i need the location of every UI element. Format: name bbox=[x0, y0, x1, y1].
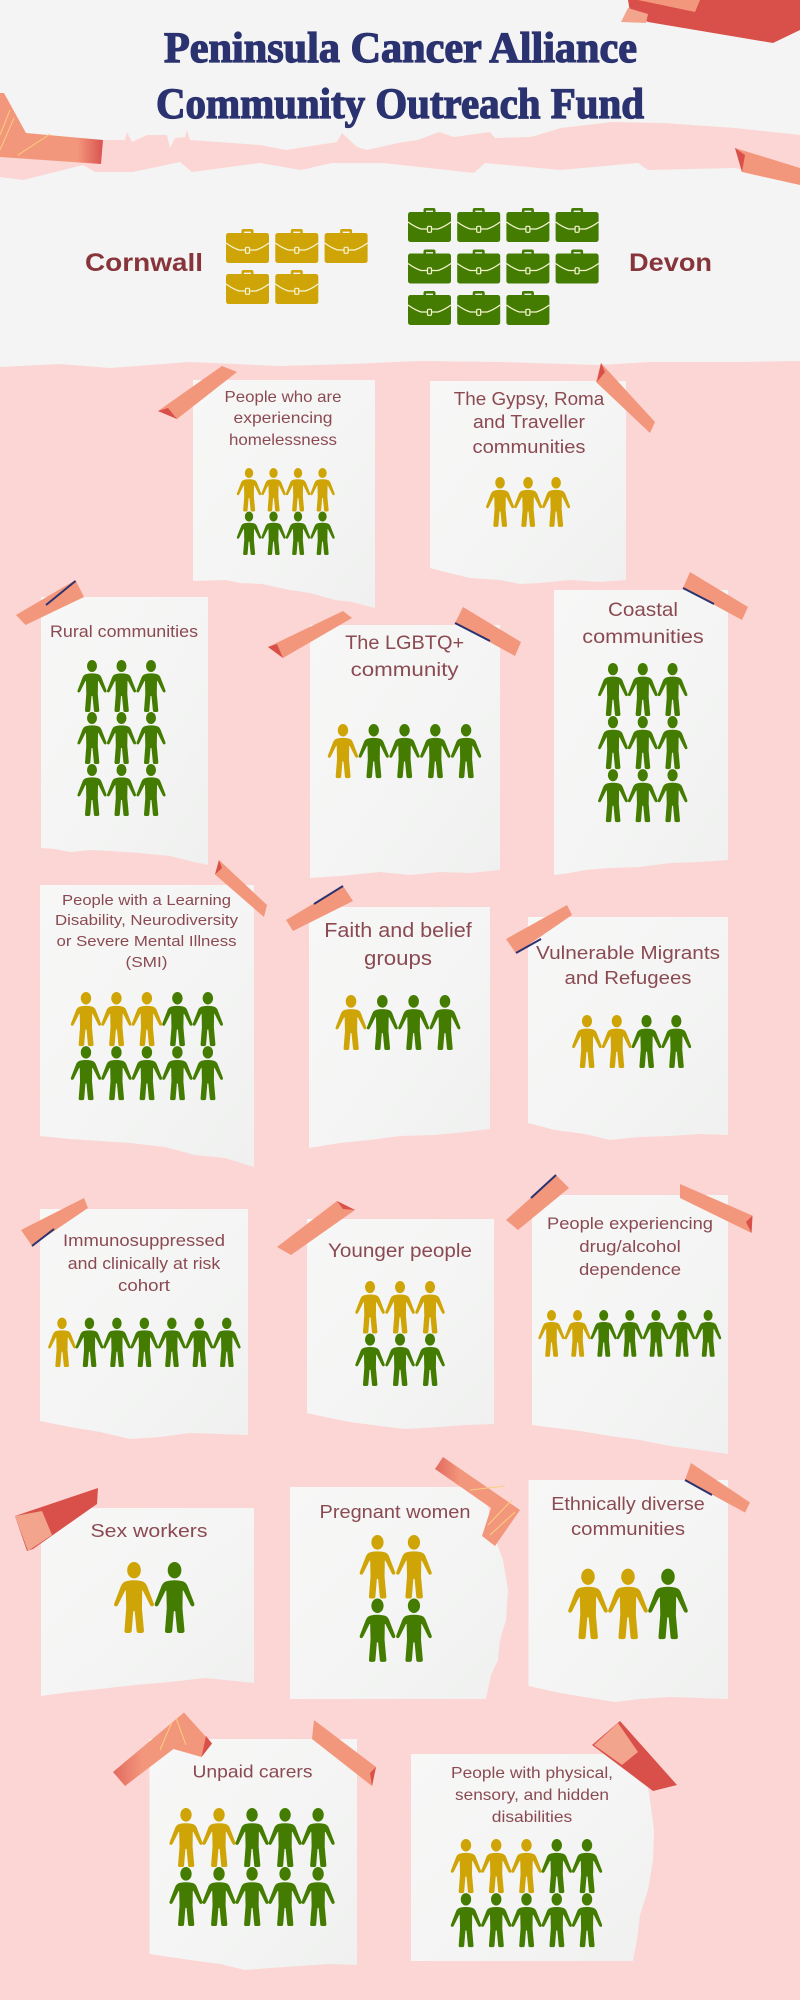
heading: Rural communities bbox=[50, 623, 198, 641]
heading bbox=[536, 943, 720, 988]
heading: Ethnically diverse bbox=[551, 1494, 705, 1514]
panel: Sex workers bbox=[15, 1488, 254, 1696]
tape bbox=[506, 905, 572, 954]
briefcases: Cornwall bbox=[226, 229, 368, 304]
heading: Faith and belief bbox=[324, 920, 472, 942]
briefcases: Devon bbox=[408, 208, 599, 325]
heading bbox=[451, 1765, 613, 1826]
heading bbox=[224, 389, 342, 449]
heading: Vulnerable Migrants bbox=[536, 943, 720, 963]
people icons bbox=[451, 1839, 602, 1947]
panel: Coastal communities bbox=[554, 572, 748, 875]
heading: Unpaid carers bbox=[192, 1762, 313, 1782]
title bbox=[156, 25, 644, 128]
heading: or Severe Mental Illness bbox=[56, 933, 236, 950]
panel: drug/alcohol dependence bbox=[506, 1175, 752, 1454]
title: Community Outreach Fund bbox=[156, 81, 644, 128]
panel: physical, sensory, hidden disabilities bbox=[411, 1721, 677, 1961]
heading: community bbox=[351, 659, 459, 681]
people icons bbox=[572, 1015, 691, 1068]
panel: Unpaid carers bbox=[113, 1712, 376, 1970]
heading: and clinically at risk bbox=[68, 1255, 221, 1273]
heading: Pregnant women bbox=[320, 1501, 470, 1522]
heading bbox=[55, 892, 239, 971]
tape bbox=[596, 363, 655, 433]
heading: groups bbox=[364, 948, 432, 970]
panel: Gypsy, Roma and Traveller bbox=[430, 363, 655, 584]
panel: homelessness bbox=[158, 366, 375, 608]
people icons bbox=[486, 477, 570, 527]
heading: Sex workers bbox=[90, 1520, 208, 1541]
people icons bbox=[538, 1310, 721, 1357]
people icons bbox=[71, 992, 223, 1100]
people icons bbox=[169, 1808, 335, 1926]
heading: communities bbox=[472, 437, 586, 457]
heading: People with physical, bbox=[451, 1765, 613, 1782]
heading: People who are bbox=[224, 389, 342, 406]
people icons bbox=[48, 1318, 241, 1367]
tape left bbox=[113, 1712, 212, 1786]
heading: cohort bbox=[118, 1277, 170, 1295]
heading: disabilities bbox=[492, 1809, 572, 1826]
tape bbox=[16, 580, 84, 625]
heading bbox=[63, 1232, 225, 1295]
heading: (SMI) bbox=[126, 954, 168, 971]
panel: Rural communities bbox=[16, 580, 208, 865]
heading: drug/alcohol bbox=[579, 1237, 681, 1256]
heading: Immunosuppressed bbox=[63, 1232, 225, 1250]
people icons bbox=[355, 1281, 445, 1386]
tape right bbox=[312, 1720, 376, 1786]
people icons bbox=[77, 660, 166, 816]
heading bbox=[324, 920, 472, 970]
header panel: light grey torn paper bbox=[0, 0, 800, 368]
heading: People experiencing bbox=[547, 1214, 713, 1233]
heading bbox=[547, 1214, 713, 1279]
tape bbox=[158, 366, 237, 419]
tape: header left salmon bbox=[0, 93, 103, 164]
people icons bbox=[328, 724, 481, 778]
heading: homelessness bbox=[229, 432, 337, 449]
heading: communities bbox=[571, 1519, 685, 1539]
tape bbox=[683, 572, 748, 620]
tape bbox=[21, 1198, 88, 1246]
people icons bbox=[568, 1569, 688, 1639]
heading bbox=[551, 1494, 705, 1539]
people icons bbox=[598, 663, 687, 822]
panel: LGBTQ+ community bbox=[268, 607, 521, 878]
panel: Vulnerable Migrants and Refugees bbox=[506, 905, 728, 1140]
heading: The LGBTQ+ bbox=[345, 632, 464, 654]
heading bbox=[582, 599, 704, 648]
heading bbox=[345, 632, 464, 681]
panel: Immunosuppressed bbox=[21, 1198, 248, 1439]
people icons bbox=[336, 995, 460, 1050]
tape: top right red bbox=[621, 0, 800, 43]
tape left bbox=[268, 611, 352, 658]
panel: Pregnant women bbox=[290, 1457, 520, 1699]
tape bbox=[286, 886, 353, 931]
tape bbox=[277, 1201, 355, 1255]
panel: Learning Disability, Neurodiversity, SMI bbox=[40, 860, 267, 1167]
tape left bbox=[506, 1175, 569, 1230]
label: Cornwall: Cornwall bbox=[85, 249, 203, 277]
tape right bbox=[455, 607, 521, 656]
heading: dependence bbox=[579, 1260, 681, 1279]
torn pink band under title bbox=[0, 122, 800, 182]
tape bbox=[215, 860, 267, 917]
heading bbox=[454, 389, 605, 457]
heading: The Gypsy, Roma bbox=[454, 389, 605, 409]
tape bbox=[685, 1463, 750, 1512]
heading: Disability, Neurodiversity bbox=[55, 912, 239, 929]
people icons bbox=[114, 1562, 194, 1633]
tape bbox=[15, 1488, 98, 1551]
title: Peninsula Cancer Alliance bbox=[164, 25, 637, 72]
panel: Younger people bbox=[277, 1201, 494, 1429]
people icons bbox=[360, 1535, 432, 1662]
heading: Younger people bbox=[328, 1241, 472, 1262]
tape bbox=[592, 1721, 677, 1791]
people icons bbox=[237, 468, 335, 555]
heading: and Traveller bbox=[473, 412, 585, 432]
label: Devon: Devon bbox=[629, 249, 712, 277]
tape: header right salmon bbox=[735, 148, 800, 185]
heading: Coastal bbox=[608, 599, 678, 621]
heading: sensory, and hidden bbox=[455, 1787, 609, 1804]
tape right bbox=[680, 1184, 752, 1233]
heading: and Refugees bbox=[564, 968, 692, 988]
tape bbox=[435, 1457, 520, 1546]
panel: Faith and belief groups bbox=[286, 886, 490, 1148]
panel: Ethnically diverse communities bbox=[528, 1463, 750, 1702]
heading: communities bbox=[582, 626, 704, 648]
heading: People with a Learning bbox=[62, 892, 231, 909]
heading: experiencing bbox=[234, 410, 332, 427]
